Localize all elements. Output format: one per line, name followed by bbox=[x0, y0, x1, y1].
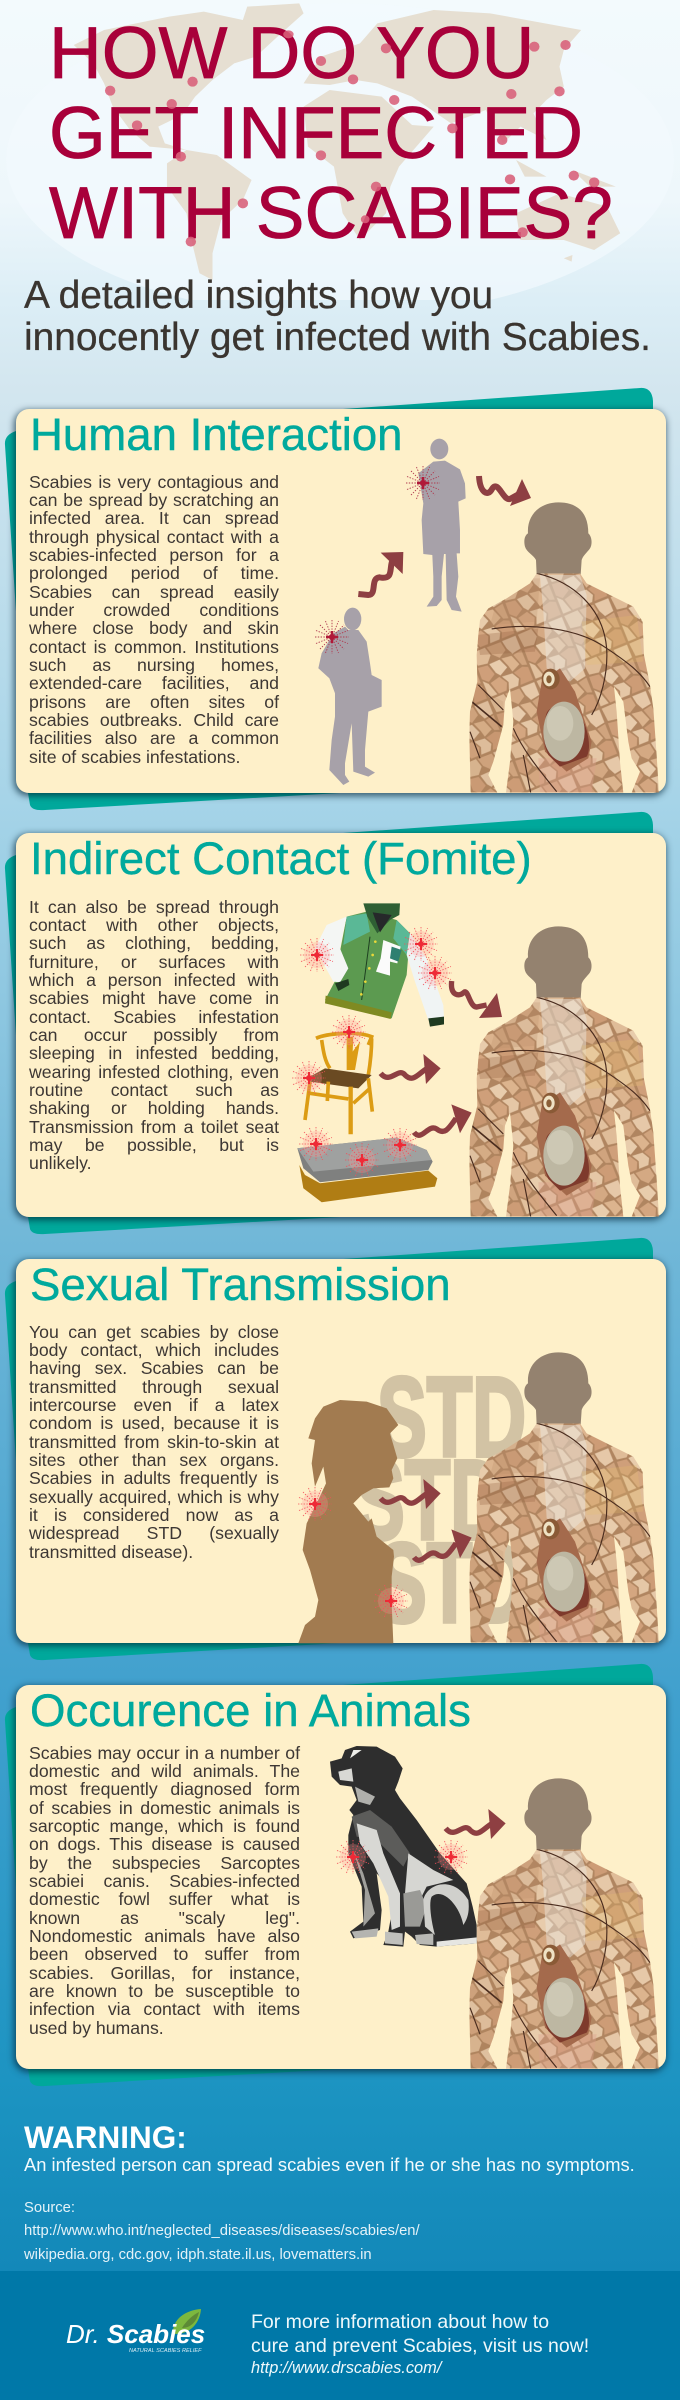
icon: woman silhouette bbox=[298, 1400, 398, 1643]
text: indirect contact: such as clothing, bedding, bbox=[29, 933, 279, 953]
subtitle bbox=[24, 274, 651, 359]
text: indirect contact: can occur possibly from bbox=[29, 1025, 279, 1045]
text: human interaction: Scabies can spread easily bbox=[29, 582, 279, 602]
heading: indirect contact: Indirect Contact (Fomite) bbox=[30, 833, 532, 884]
text: occurence in animals: on dogs. This disease is caused bbox=[29, 1834, 300, 1854]
text: sexual transmission: body contact, which includes bbox=[29, 1340, 279, 1360]
logo wordmark: Dr. Scabies bbox=[66, 2319, 205, 2349]
text: occurence in animals bbox=[29, 1743, 300, 2038]
call to action: For more information about how to bbox=[251, 2311, 549, 2333]
title: GET INFECTED bbox=[49, 93, 583, 174]
icon: infection burst on man bbox=[315, 620, 349, 654]
icon: standing man silhouette bbox=[318, 608, 382, 785]
title bbox=[48, 13, 613, 254]
world map background bbox=[51, 4, 626, 300]
arrow: woman to body bbox=[479, 476, 531, 506]
panel: sexual transmission bbox=[4, 1238, 671, 1660]
text: indirect contact: sleeping in infested bedding, bbox=[29, 1043, 279, 1063]
text: sexual transmission: transmitted disease). bbox=[29, 1542, 193, 1562]
text: indirect contact: scabies might have come in bbox=[29, 988, 279, 1008]
text: indirect contact: furniture, or surfaces with bbox=[29, 952, 279, 972]
text: human interaction: site of scabies infestations. bbox=[29, 747, 240, 767]
decorative STD lettering: STD bbox=[377, 1520, 526, 1646]
sources: wikipedia.org, cdc.gov, idph.state.il.us, lovematters.in bbox=[24, 2247, 372, 2263]
text: occurence in animals: sarcoptic mange, which is found bbox=[29, 1816, 300, 1836]
icon: infection burst on woman bbox=[406, 466, 440, 500]
text: indirect contact bbox=[29, 897, 279, 1173]
text: occurence in animals: most frequently diagnosed form bbox=[29, 1779, 300, 1799]
arrow: jacket to body bbox=[451, 981, 502, 1018]
call to action: cure and prevent Scabies, visit us now! bbox=[251, 2335, 589, 2357]
panel: occurence in animals bbox=[4, 1664, 671, 2086]
text: human interaction: such as nursing homes, bbox=[29, 655, 279, 675]
text: occurence in animals: Nondomestic animals have also bbox=[29, 1926, 300, 1946]
text: sexual transmission: sites other than sex organs. bbox=[29, 1450, 279, 1470]
figure: infected body bbox=[467, 1352, 663, 1645]
text: human interaction: under crowded conditions bbox=[29, 600, 279, 620]
text: occurence in animals: by the subspecies Sarcoptes bbox=[29, 1853, 300, 1873]
decorative STD lettering: STD bbox=[377, 1354, 526, 1480]
heading: sexual transmission: Sexual Transmission bbox=[30, 1259, 451, 1310]
text: human interaction: facilities also are a common bbox=[29, 728, 279, 748]
text: occurence in animals: Scabies may occur in a number of bbox=[29, 1743, 300, 1763]
arrow: man to woman bbox=[358, 552, 403, 595]
text: human interaction: through physical contact with a bbox=[29, 527, 279, 547]
footer bbox=[0, 2271, 680, 2400]
text: indirect contact: unlikely. bbox=[29, 1153, 92, 1173]
icon: infection bursts on objects bbox=[292, 927, 452, 1177]
text: human interaction bbox=[29, 472, 280, 767]
text: human interaction: scabies outbreaks. Child care bbox=[29, 710, 279, 730]
arrow: chair to body bbox=[381, 1054, 441, 1084]
figure: infected body bbox=[467, 502, 663, 795]
subtitle: innocently get infected with Scabies. bbox=[24, 316, 651, 359]
text: occurence in animals: are known to be susceptible to bbox=[29, 1981, 300, 2001]
text: sexual transmission: condom is used, because it is bbox=[29, 1413, 279, 1433]
text: sexual transmission: transmitted from skin-to-skin at bbox=[29, 1432, 279, 1452]
text: human interaction: prolonged period of time. bbox=[29, 563, 279, 583]
text: occurence in animals: of scabies in domestic animals is bbox=[29, 1798, 300, 1818]
text: occurence in animals: infection via contact with items bbox=[29, 1999, 300, 2019]
icon: folded blankets bbox=[297, 1138, 437, 1202]
warning heading: WARNING: bbox=[24, 2119, 187, 2155]
text: occurence in animals: domestic fowl suffer what is bbox=[29, 1889, 300, 1909]
text: sexual transmission: transmitted through sexual bbox=[29, 1377, 279, 1397]
text: human interaction: scabies-infected person for a bbox=[29, 545, 279, 565]
text: sexual transmission: sexually acquired, which is why bbox=[29, 1487, 279, 1507]
text: human interaction: Scabies is very contagious and bbox=[29, 472, 279, 492]
text: occurence in animals: used by humans. bbox=[29, 2018, 164, 2038]
panel: indirect contact bbox=[4, 812, 671, 1234]
text: sexual transmission: widespread STD (sexually bbox=[29, 1523, 279, 1543]
text: sexual transmission bbox=[29, 1322, 279, 1562]
illustration: people passing infection to body bbox=[315, 438, 659, 792]
icon: wooden chair bbox=[305, 1033, 372, 1134]
figure: infected body bbox=[467, 926, 663, 1219]
text: indirect contact: Transmission from a toilet seat bbox=[29, 1117, 279, 1137]
sources bbox=[24, 2200, 420, 2263]
text: human interaction: contact is common. Institutions bbox=[29, 637, 279, 657]
illustration: contaminated objects bbox=[292, 903, 659, 1216]
text: human interaction: prisons are often sites of bbox=[29, 692, 279, 712]
text: sexual transmission: it is considered now as a bbox=[29, 1505, 279, 1525]
text: occurence in animals: scabiei canis. Scabies-infected bbox=[29, 1871, 300, 1891]
title: HOW DO YOU bbox=[49, 13, 534, 94]
text: indirect contact: may be possible, but is bbox=[29, 1135, 279, 1155]
text: occurence in animals: scabies. Gorillas, for instance, bbox=[29, 1963, 300, 1983]
decorative STD lettering: STD bbox=[355, 1437, 504, 1563]
text: human interaction: extended-care facilities, and bbox=[29, 673, 279, 693]
heading: human interaction: Human Interaction bbox=[30, 409, 403, 460]
text: indirect contact: shaking or holding hands. bbox=[29, 1098, 279, 1118]
text: sexual transmission: intercourse even if a latex bbox=[29, 1395, 279, 1415]
logo: Dr. Scabies bbox=[66, 2309, 205, 2354]
sources: Source: bbox=[24, 2200, 75, 2216]
map infection dots bbox=[104, 30, 600, 247]
illustration: woman and STD lettering bbox=[298, 1352, 659, 1646]
arrow: woman to body lower bbox=[414, 1529, 472, 1560]
text: indirect contact: contact. Scabies infestation bbox=[29, 1007, 279, 1027]
text: indirect contact: wearing infested clothing, even bbox=[29, 1062, 279, 1082]
text: human interaction: infected area. It can spread bbox=[29, 508, 279, 528]
figure: infected body bbox=[467, 1778, 663, 2071]
icon: infection bursts on dog bbox=[336, 1840, 468, 1874]
text: human interaction: where close body and skin bbox=[29, 618, 279, 638]
heading: occurence in animals: Occurence in Animals bbox=[30, 1685, 471, 1736]
text: indirect contact: routine contact such as bbox=[29, 1080, 279, 1100]
icon: leaf bbox=[173, 2309, 201, 2334]
text: sexual transmission: having sex. Scabies can be bbox=[29, 1358, 279, 1378]
illustration: infected dog bbox=[330, 1746, 659, 2069]
text: occurence in animals: been observed to suffer from bbox=[29, 1944, 300, 1964]
panel: human interaction bbox=[4, 388, 672, 810]
text: human interaction: can be spread by scratching an bbox=[29, 490, 279, 510]
text: occurence in animals: domestic and wild animals. The bbox=[29, 1761, 300, 1781]
text: sexual transmission: You can get scabies by close bbox=[29, 1322, 279, 1342]
icon: sitting dog bbox=[330, 1746, 477, 1947]
text: indirect contact: contact with other objects, bbox=[29, 915, 279, 935]
title: WITH SCABIES? bbox=[49, 173, 613, 254]
subtitle: A detailed insights how you bbox=[24, 274, 493, 317]
icon: varsity jacket bbox=[315, 903, 444, 1027]
arrow: dog to body bbox=[446, 1809, 506, 1839]
icon: infection bursts on woman bbox=[298, 1487, 408, 1618]
text: indirect contact: It can also be spread through bbox=[29, 897, 279, 917]
icon: standing woman silhouette bbox=[418, 439, 466, 612]
text: occurence in animals: known as "scaly leg". bbox=[29, 1908, 300, 1928]
arrow: woman to body upper bbox=[381, 1479, 441, 1509]
decorative STD lettering bbox=[355, 1354, 526, 1646]
arrow: blanket to body bbox=[414, 1104, 472, 1135]
text: sexual transmission: Scabies in adults frequently is bbox=[29, 1468, 279, 1488]
text: indirect contact: which a person infected with bbox=[29, 970, 279, 990]
warning text: An infested person can spread scabies even if he or she has no symptoms. bbox=[24, 2154, 635, 2175]
website link: http://www.drscabies.com/ bbox=[251, 2359, 441, 2377]
sources: http://www.who.int/neglected_diseases/diseases/scabies/en/ bbox=[24, 2223, 420, 2239]
call to action bbox=[251, 2311, 589, 2357]
logo tagline: NATURAL SCABIES RELIEF bbox=[129, 2348, 202, 2354]
